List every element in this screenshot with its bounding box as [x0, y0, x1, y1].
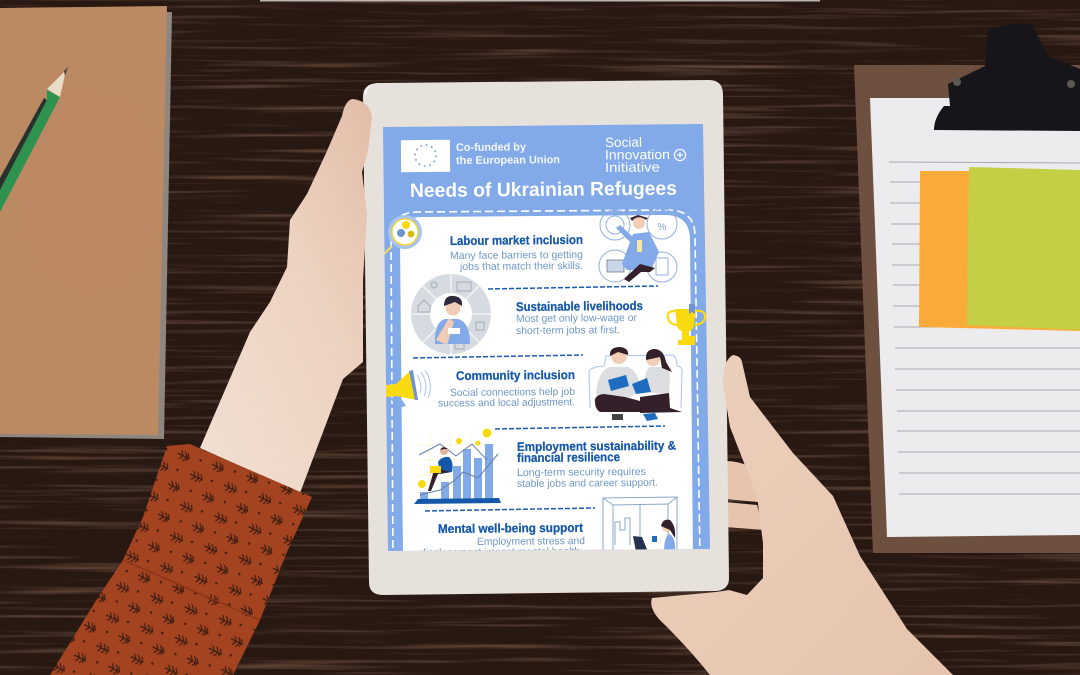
section: employment sustainability text: Employment sustainability &: [517, 439, 676, 454]
black clip: [934, 24, 1080, 131]
section: sustainable livelihoods text: Sustainable livelihoods: [516, 299, 643, 314]
section: mental well-being text: Mental well-being support: [438, 521, 584, 536]
illustration: person with career icons: [599, 209, 677, 282]
paper with ruled lines: [870, 98, 1080, 537]
section: community inclusion text: success and local adjustment.: [438, 396, 575, 409]
illustration: person at window with laptop: [603, 497, 677, 552]
icon: megaphone: [386, 370, 430, 408]
section: labour market inclusion text: jobs that match their skills.: [459, 260, 583, 273]
tablet: [363, 80, 729, 595]
co-funded text: the European Union: [456, 154, 560, 167]
section: mental well-being text: Employment stress and: [477, 535, 585, 548]
section: sustainable livelihoods text: short-term jobs at first.: [516, 324, 620, 337]
title: Needs of Ukrainian Refugees: [410, 178, 677, 202]
Social Innovation Initiative logo: [606, 137, 686, 172]
section: sustainable livelihoods text: Most get only low-wage or: [516, 312, 638, 325]
dashed divider: [495, 426, 665, 429]
illustration: rising bar chart with person: [414, 428, 501, 504]
section: employment sustainability text: [517, 439, 676, 490]
device edge at top: [260, 0, 820, 2]
infographic screen: [383, 124, 710, 560]
right hand: [651, 355, 953, 675]
section: labour market inclusion text: Labour market inclusion: [450, 233, 583, 248]
icon: trophy: [668, 304, 705, 345]
notebook: [0, 6, 172, 439]
co-funded text: [456, 141, 560, 167]
section: employment sustainability text: Long-term security requires: [517, 466, 646, 479]
orange sticky note: [919, 171, 1080, 331]
section: community inclusion text: Social connections help job: [450, 386, 575, 399]
section: mental well-being text: [421, 523, 584, 551]
fingers behind tablet: [725, 461, 764, 530]
white content panel: [391, 210, 700, 560]
green sticky note: [967, 167, 1080, 330]
Social Innovation Initiative logo: Innovation: [605, 147, 670, 162]
orange patterned sleeve: [50, 444, 312, 675]
Social Innovation Initiative logo: Initiative: [605, 160, 660, 175]
EU flag: [401, 140, 450, 172]
section: community inclusion text: [438, 368, 575, 409]
section: sustainable livelihoods text: [516, 299, 643, 337]
section: mental well-being text: displacement impact mental health.: [420, 546, 583, 559]
illustration: person in icon wheel: [411, 274, 491, 354]
illustration: couple on sofa: [589, 347, 682, 421]
pencil: [0, 67, 68, 212]
section: employment sustainability text: stable jobs and career support.: [517, 477, 658, 490]
dashed divider: [488, 286, 658, 289]
Social Innovation Initiative logo: Social: [605, 135, 642, 150]
clipboard: [854, 24, 1080, 553]
co-funded text: Co-funded by: [456, 141, 527, 154]
left arm and hand: [200, 99, 372, 493]
magnifier icon: [384, 215, 422, 254]
section: employment sustainability text: financial resilience: [517, 450, 620, 465]
section: labour market inclusion text: [450, 233, 583, 273]
illustration: person with career icons: %: [658, 222, 667, 233]
section: labour market inclusion text: Many face barriers to getting: [450, 249, 583, 262]
dashed divider: [425, 508, 595, 511]
dashed divider: [413, 355, 583, 358]
section: community inclusion text: Community inclusion: [456, 368, 575, 383]
